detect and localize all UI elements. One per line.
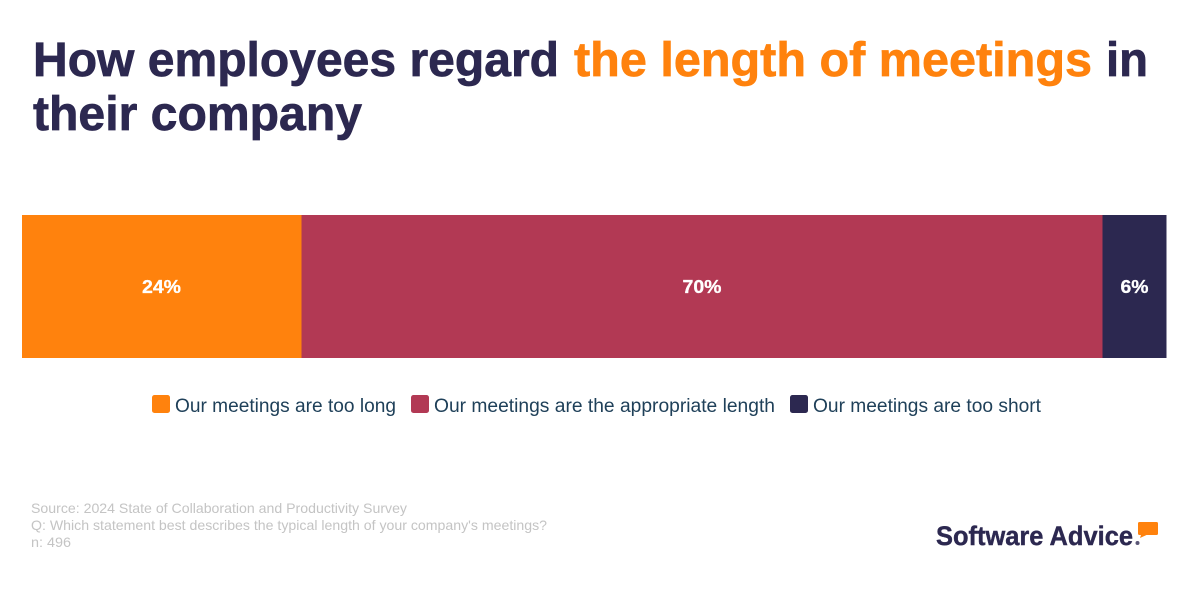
bar segment: appropriate length 70% xyxy=(302,215,1102,358)
icon: orange speech bubble xyxy=(1138,522,1158,538)
title: How employees regard xyxy=(33,34,559,87)
source note: Q: Which statement best describes the typical length of your company's meetings? xyxy=(31,517,547,533)
source note xyxy=(31,500,547,550)
legend item: too short: Our meetings are too short xyxy=(813,396,1042,417)
source note: Source: 2024 State of Collaboration and Productivity Survey xyxy=(31,500,407,516)
title: in xyxy=(1106,34,1148,87)
bar segment: too short 6% xyxy=(1102,215,1166,358)
bar segment: too long 24% xyxy=(22,215,302,358)
legend xyxy=(152,395,1042,417)
source note: n: 496 xyxy=(31,534,71,550)
legend item: too long: Our meetings are too long xyxy=(175,396,396,417)
title: the length of meetings xyxy=(574,34,1092,87)
bar segment: too long 24%: 24% xyxy=(142,277,181,297)
bar segment: appropriate length 70%: 70% xyxy=(682,277,722,297)
title: their company xyxy=(33,88,362,141)
logo: Software Advice: Software Advice xyxy=(936,521,1133,551)
icon: registered mark xyxy=(1136,541,1140,545)
stacked bar chart xyxy=(22,215,1166,358)
legend item: appropriate length: Our meetings are the appropriate length xyxy=(434,396,775,417)
bar segment: too short 6%: 6% xyxy=(1120,277,1148,297)
title xyxy=(33,34,1148,141)
